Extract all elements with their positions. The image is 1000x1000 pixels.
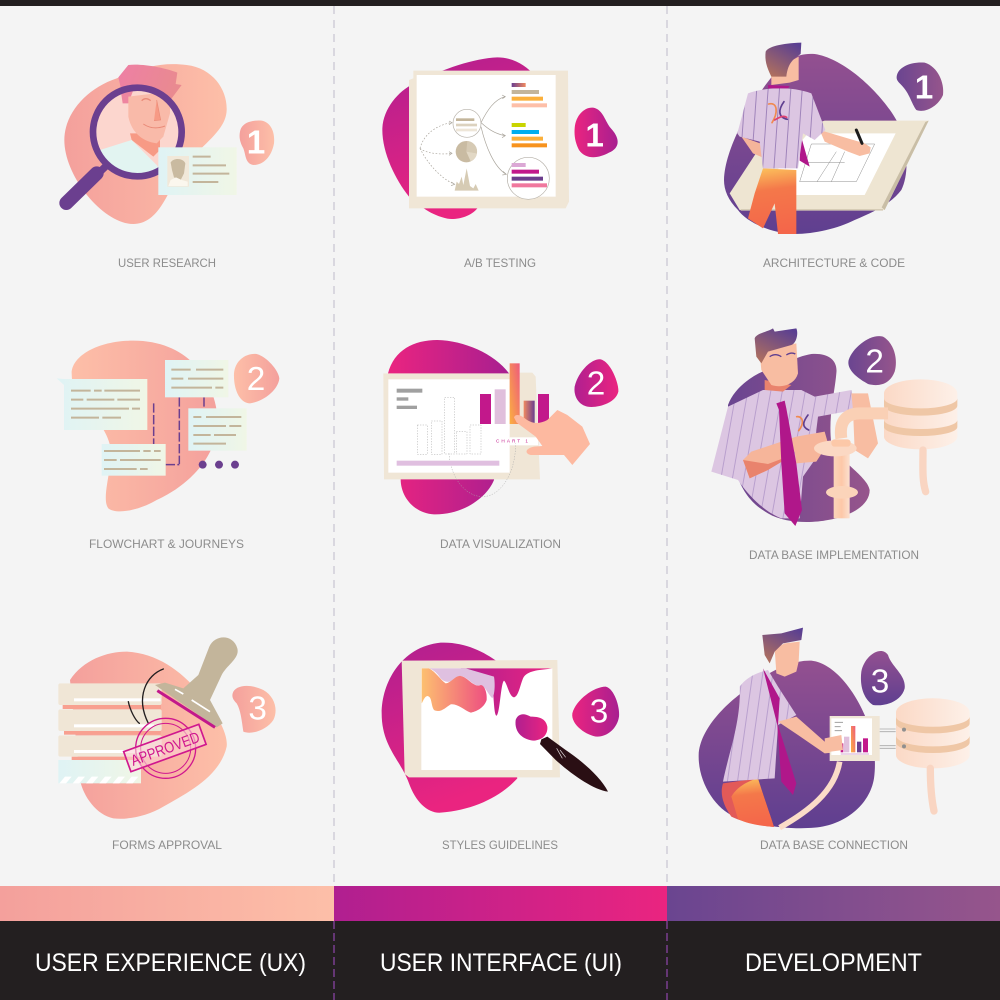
- panel: data visualization illustration: [383, 340, 618, 514]
- speech card one: [57, 378, 147, 430]
- cream frame: [383, 373, 540, 479]
- heading: user interface: USER INTERFACE (UI): [380, 949, 622, 977]
- badge 3: [861, 651, 905, 705]
- badge 2: 2: [247, 361, 265, 398]
- label: forms approval: FORMS APPROVAL: [112, 838, 222, 852]
- badge 2: [574, 359, 618, 407]
- circle of text lines: [453, 109, 481, 137]
- badge 3: 3: [248, 691, 267, 728]
- man side view: [722, 628, 843, 827]
- connector wires: [880, 729, 896, 748]
- blob: data visualization: [388, 340, 509, 514]
- badge 2: [848, 336, 896, 385]
- cream frame: [402, 660, 560, 777]
- chart caption: CHART 1: [496, 439, 528, 444]
- white page: [388, 379, 510, 473]
- dashed bar chart: [417, 397, 516, 497]
- pie chart: [456, 141, 477, 162]
- badge 3: 3: [871, 663, 889, 700]
- blob: flowchart: [72, 341, 217, 511]
- blob: A/B testing: [382, 57, 534, 219]
- panel: data base connection illustration: [699, 628, 970, 828]
- database cylinder: [896, 698, 970, 811]
- label: data base connection: DATA BASE CONNECTION: [760, 838, 908, 852]
- bar group two: [512, 123, 547, 147]
- blob: forms approval: [70, 652, 227, 819]
- coloured bar chart: [480, 363, 549, 424]
- stack of forms: [58, 683, 162, 783]
- tablet with chart: [825, 716, 880, 761]
- dashed connectors: [154, 397, 204, 465]
- label: data base implementation: DATA BASE IMPLEMENTATION: [749, 548, 919, 562]
- man with tie: [711, 328, 878, 526]
- badge 1: [240, 121, 274, 165]
- label: styles guidelines: STYLES GUIDELINES: [442, 838, 558, 852]
- white page: [417, 75, 556, 197]
- label: A/B testing: A/B TESTING: [464, 256, 536, 270]
- footer colour bar: UX: [0, 886, 334, 921]
- blob: data base implementation: [728, 354, 870, 522]
- badge 3: 3: [590, 693, 608, 730]
- top black band: [0, 0, 1000, 6]
- lilac bar: [397, 461, 499, 466]
- orange paint drip: [422, 668, 487, 713]
- blob: architecture: [724, 54, 907, 234]
- blob: user research: [64, 64, 227, 224]
- database cylinder: [884, 379, 957, 492]
- man from behind: [737, 43, 871, 234]
- bar group one: [512, 83, 547, 107]
- hair: [118, 65, 182, 98]
- magnifying glass: [66, 88, 182, 203]
- label: user research: USER RESEARCH: [118, 256, 216, 270]
- paint brush: [515, 714, 608, 792]
- panel: styles guidelines illustration: [382, 643, 619, 813]
- area chart: [455, 168, 479, 191]
- magenta paint drip: [461, 668, 552, 716]
- cream frame: [409, 71, 569, 208]
- approved imprint: APPROVED: [129, 729, 202, 770]
- panel: flowchart and journeys illustration: [57, 341, 279, 511]
- pipe: [814, 413, 888, 518]
- badge 3: [572, 687, 619, 737]
- lilac paint drip: [429, 668, 495, 698]
- rubber stamp: [155, 637, 238, 727]
- pointing hand: [514, 410, 590, 465]
- panel: A/B testing illustration: [382, 57, 618, 219]
- badge 1: 1: [585, 117, 604, 154]
- badge 1: 1: [247, 124, 265, 161]
- label: architecture and code: ARCHITECTURE & CODE: [763, 256, 905, 270]
- white canvas: [421, 668, 552, 770]
- label: data visualization: DATA VISUALIZATION: [440, 537, 561, 551]
- badge 1: 1: [915, 69, 933, 106]
- badge 1: [575, 108, 618, 157]
- footer colour bar: development: [667, 886, 1000, 921]
- three dots: [199, 461, 239, 469]
- text lines: [397, 389, 422, 409]
- ID card: [158, 147, 237, 195]
- approved imprint: [124, 718, 206, 778]
- panel: architecture and code illustration: [724, 43, 943, 234]
- drafting board: [730, 121, 929, 211]
- panel: forms approval illustration: [58, 637, 276, 819]
- speech card four: [102, 444, 166, 476]
- badge 1: [897, 63, 943, 111]
- shirt logo: [797, 415, 809, 431]
- panel: user research illustration: [64, 64, 274, 224]
- blob: data base connection: [699, 661, 875, 828]
- footer colour bar: UI: [334, 886, 667, 921]
- cable from tablet: [780, 762, 840, 828]
- flow arrows: [420, 95, 506, 186]
- heading: user experience: USER EXPERIENCE (UX): [35, 949, 306, 977]
- white caption strip: [510, 437, 538, 445]
- badge 2: 2: [865, 344, 884, 381]
- badge 3: [232, 686, 276, 733]
- shirt logo: [769, 102, 787, 123]
- blob: styles guidelines: [382, 643, 517, 813]
- heading: development: DEVELOPMENT: [745, 949, 922, 977]
- panel: data base implementation illustration: [711, 328, 957, 526]
- badge 2: [234, 354, 279, 403]
- label: flowchart and journeys: FLOWCHART & JOURNEYS: [89, 537, 244, 551]
- speech card two: [165, 360, 228, 397]
- footer black band: [0, 921, 1000, 1000]
- badge 2: 2: [587, 366, 605, 403]
- speech card three: [188, 408, 247, 451]
- motion arcs: [128, 669, 163, 723]
- bar group three in circle: [507, 157, 549, 199]
